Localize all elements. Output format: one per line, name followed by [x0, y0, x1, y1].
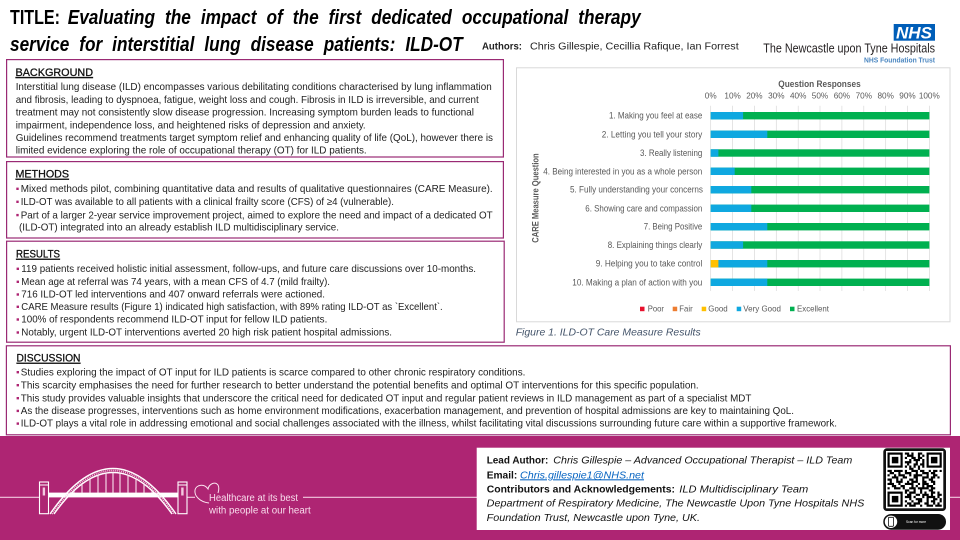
text block: lead author: Foundation Trust, Newcastle upon Tyne, UK. — [487, 512, 700, 524]
authors: Authors: — [482, 40, 522, 52]
heading: background: BACKGROUND — [16, 67, 93, 79]
panel: chart — [516, 68, 950, 322]
x axis labels — [705, 92, 940, 101]
tagline: Healthcare at its best — [209, 493, 298, 504]
title: service for interstitial lung disease patients: ILD-OT — [10, 34, 464, 56]
panel: background — [7, 60, 503, 157]
text block: discussion — [17, 367, 837, 430]
QR code — [883, 448, 946, 530]
title: TITLE: — [10, 7, 60, 29]
x axis labels: 80% — [878, 92, 894, 101]
text block: discussion: As the disease progresses, interventions such as home environment modifications, exacerbation management, and prevention of hospital admissions are key to maintaining QoL. — [21, 406, 794, 417]
stacked bars — [711, 112, 929, 286]
authors: Chris Gillespie, Cecillia Rafique, Ian Forrest — [530, 40, 739, 52]
x axis labels: 30% — [768, 92, 784, 101]
tagline — [208, 493, 311, 517]
text block: methods: ILD-OT was available to all patients with a clinical frailty score (CFS) of ≥4 (vulnerable). — [21, 197, 394, 208]
NHS trust logo — [763, 24, 935, 64]
text block: lead author: Email: — [487, 469, 517, 481]
x axis labels: 70% — [856, 92, 872, 101]
x axis labels: 50% — [812, 92, 828, 101]
question labels: 8. Explaining things clearly — [608, 240, 703, 250]
text block: results — [17, 264, 476, 339]
legend: Very Good — [743, 304, 781, 314]
text block: results: 100% of respondents recommend ILD-OT input for fellow ILD patients. — [21, 315, 327, 326]
text block: background — [16, 82, 493, 157]
text block: lead author: Chris.gillespie1@NHS.net — [520, 469, 645, 481]
legend — [640, 304, 830, 314]
text block: discussion: ILD-OT plays a vital role in addressing emotional and social challenges associated with the illness, whilst facilitating vital discussions surrounding future care within a supportive framework. — [21, 419, 837, 430]
panel: contact — [477, 448, 950, 530]
question labels: 2. Letting you tell your story — [602, 129, 703, 139]
text block: methods: Mixed methods pilot, combining quantitative data and results of qualitative questionnaires (CARE Measure). — [21, 184, 493, 195]
NHS trust logo: NHS — [896, 24, 932, 42]
text block: discussion: This study provides valuable insights that underscore the critical need for dedicated OT input and regular patient reviews in ILD management as part of a specialist MDT — [21, 393, 751, 404]
footer line — [0, 496, 960, 498]
question labels: 10. Making a plan of action with you — [572, 277, 702, 287]
text block: results: 716 ILD-OT led interventions and 407 onward referrals were actioned. — [21, 290, 325, 301]
question labels: 6. Showing care and compassion — [585, 203, 702, 213]
panel: discussion — [6, 346, 950, 435]
text block: results: 119 patients received holistic initial assessment, follow-ups, and future care discussions over 10-months. — [21, 264, 476, 275]
panel: methods — [7, 162, 503, 238]
tagline: with people at our heart — [208, 506, 311, 517]
icon: heart — [195, 483, 219, 503]
NHS trust logo: The Newcastle upon Tyne Hospitals — [763, 42, 935, 56]
NHS trust logo: NHS Foundation Trust — [864, 55, 935, 64]
text block: methods: Part of a larger 2-year service improvement project, aimed to explore the need and impact of a dedicated OT — [21, 210, 493, 221]
question labels: 5. Fully understanding your concerns — [570, 185, 703, 195]
text block: lead author: Lead Author: — [487, 454, 548, 466]
text block: discussion: Studies exploring the impact of OT input for ILD patients is scarce compared to other chronic respiratory conditions. — [21, 367, 525, 378]
x axis labels: 90% — [899, 92, 916, 101]
figure caption: Figure 1. ILD-OT Care Measure Results — [516, 327, 701, 339]
question labels: 4. Being interested in you as a whole person — [543, 166, 702, 176]
text block: lead author: Department of Respiratory Medicine, The Newcastle Upon Tyne Hospitals NHS — [487, 497, 864, 509]
text block: discussion: This scarcity emphasises the need for further research to better understand the potential benefits and optimal OT interventions for this specific population. — [21, 380, 699, 391]
footer band — [0, 436, 960, 540]
text block: background: limited evidence exploring the role of occupational therapy (OT) for ILD patients. — [16, 146, 367, 157]
title — [10, 7, 641, 56]
text block: background: impairment, independence loss, and heightened risks of depression and anxiety. — [16, 120, 366, 131]
x axis labels: 100% — [919, 92, 940, 101]
title: Evaluating the impact of the first dedicated occupational therapy — [68, 7, 641, 29]
text block: background: and fibrosis, leading to dyspnoea, fatigue, weight loss and cough. Fibrosis in ILD is irreversible, and current — [16, 95, 479, 106]
text block: lead author: ILD Multidisciplinary Team — [679, 483, 809, 495]
question labels — [543, 111, 703, 287]
text block: results: Mean age at referral was 74 years, with a mean CFS of 4.7 (mild frailty). — [21, 277, 330, 288]
heading: results: RESULTS — [16, 249, 60, 261]
x axis labels: 40% — [790, 92, 806, 101]
question labels: 3. Really listening — [640, 148, 702, 158]
legend: Good — [708, 304, 728, 314]
question labels: 9. Helping you to take control — [596, 259, 702, 269]
chart title: Question Responses — [778, 79, 861, 89]
text block: lead author: Chris Gillespie – Advanced Occupational Therapist – ILD Team — [553, 454, 853, 466]
text block: background: treatment may not consistently slow disease progression. Increasing symptom burden leads to functional — [16, 108, 474, 119]
x axis labels: 0% — [705, 92, 717, 101]
x axis labels: 60% — [834, 92, 850, 101]
text block: methods — [16, 184, 493, 234]
question labels: 1. Making you feel at ease — [609, 111, 702, 121]
text block: results: Notably, urgent ILD-OT interventions averted 20 high risk patient hospital admissions. — [21, 328, 392, 339]
text block: background: Guidelines recommend treatments target symptom relief and enhancing quality of life (QoL), however there is — [16, 133, 493, 144]
text block: lead author — [487, 454, 864, 524]
y axis title: CARE Measure Question — [530, 153, 542, 243]
x axis labels: 20% — [746, 92, 763, 101]
legend: Excellent — [797, 304, 830, 314]
icon: bridge — [40, 468, 187, 514]
text block: methods: (ILD-OT) integrated into an already establish ILD multidisciplinary service. — [19, 222, 339, 234]
heading: methods: METHODS — [16, 169, 69, 181]
heading: discussion: DISCUSSION — [16, 353, 81, 365]
legend: Fair — [679, 304, 693, 314]
legend: Poor — [648, 304, 664, 314]
text block: background: Interstitial lung disease (ILD) encompasses various debilitating conditions characterised by lung inflammation — [16, 82, 492, 93]
panel: results — [7, 241, 504, 342]
question labels: 7. Being Positive — [644, 222, 702, 232]
scan pill: Scan for more — [906, 520, 926, 524]
text block: lead author: Contributors and Acknowledgements: — [487, 483, 675, 495]
x axis labels: 10% — [724, 92, 741, 101]
text block: results: CARE Measure results (Figure 1) indicated high satisfaction, with 89% rating ILD-OT as `Excellent`. — [21, 301, 443, 313]
